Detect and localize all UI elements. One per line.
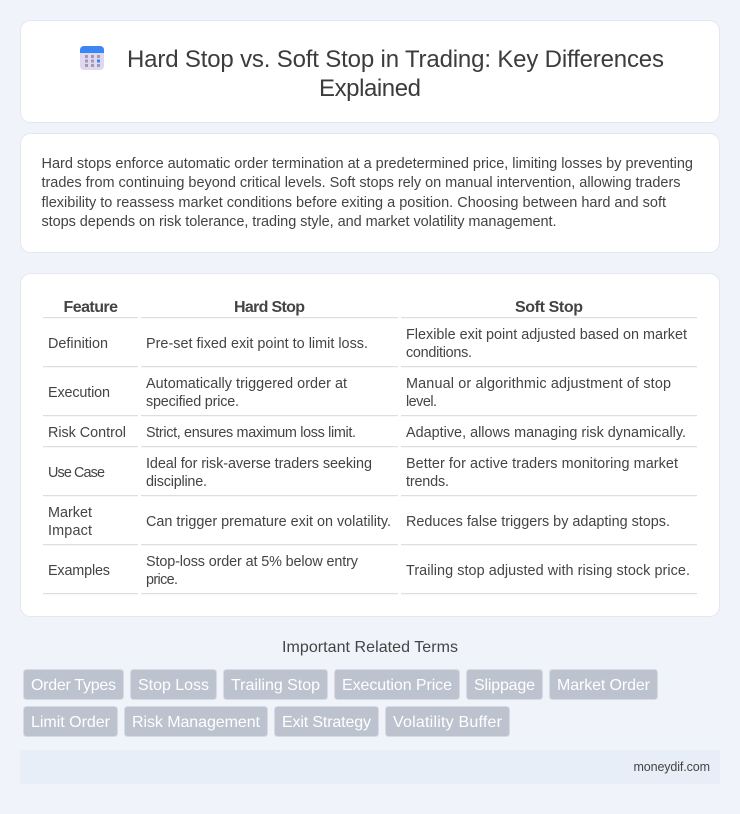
footer: moneydif.com [634,760,710,774]
text block: description [42,156,693,230]
row: execution: Automatically triggered order at [146,376,347,392]
row: risk control: Strict, ensures maximum loss limit. [146,425,356,441]
row: use case [48,456,678,490]
row: risk control [48,425,686,441]
row: execution: specified price. [146,394,239,410]
row: definition: Flexible exit point adjusted based on market [406,327,687,343]
row: market impact: Market [48,505,92,521]
tags: related terms: Exit Strategy [282,714,371,731]
row: definition: Definition [48,336,108,352]
footer [20,750,720,784]
row: examples: price. [146,572,178,588]
row: market impact: Impact [48,523,92,539]
row: risk control: Risk Control [48,425,126,441]
title: Hard Stop vs. Soft Stop in Trading: Key Differences [127,46,664,73]
table header: Feature [64,299,118,316]
tags: related terms: Slippage [474,677,535,694]
tags: related terms: Limit Order [31,714,111,731]
text block: description: trades from continuing beyond critical levels. Soft stops rely on manual intervention, allowing traders [42,175,680,191]
row: use case: Use Case [48,465,105,481]
tags: related terms [24,670,658,736]
row: use case: trends. [406,474,449,490]
row: market impact: Reduces false triggers by adapting stops. [406,514,670,530]
row: definition [48,327,687,361]
row: examples: Examples [48,563,110,579]
title [127,46,664,102]
panel: description [20,134,720,252]
row: definition: conditions. [406,345,472,361]
row: execution: level. [406,394,437,410]
row: market impact: Can trigger premature exit on volatility. [146,514,391,530]
row: risk control: Adaptive, allows managing risk dynamically. [406,425,686,441]
tags: related terms: Trailing Stop [231,677,320,694]
icon: calendar [80,46,104,70]
row: use case: Ideal for risk-averse traders seeking [146,456,372,472]
row: use case: Better for active traders monitoring market [406,456,678,472]
tags: related terms: Stop Loss [138,677,209,694]
row: definition: Pre-set fixed exit point to limit loss. [146,336,368,352]
heading: related terms: Important Related Terms [282,639,458,656]
row: execution [48,376,671,410]
tags: related terms: Risk Management [132,714,261,731]
row: execution: Execution [48,385,110,401]
row: use case: discipline. [146,474,207,490]
text block: description: Hard stops enforce automatic order termination at a predetermined price, limiting losses by preventing [42,156,693,172]
text block: description: flexibility to reassess market conditions before exiting a position. Choosing between hard and soft [42,195,666,211]
tags: related terms: Market Order [557,677,651,694]
title: Explained [319,75,421,102]
panel: header [20,20,720,122]
tags: related terms: Execution Price [342,677,452,694]
table header: Soft Stop [515,299,583,316]
table header: Hard Stop [234,299,305,316]
table header [64,299,583,316]
row: market impact [48,505,670,539]
row: examples: Stop-loss order at 5% below entry [146,554,359,570]
panel: comparison table [20,274,720,616]
row: execution: Manual or algorithmic adjustment of stop [406,376,671,392]
row: examples: Trailing stop adjusted with rising stock price. [406,563,690,579]
tags: related terms: Order Types [31,677,116,694]
text block: description: stops depends on risk tolerance, trading style, and market volatility management. [42,214,556,230]
row: examples [48,554,690,588]
tags: related terms: Volatility Buffer [393,714,503,731]
